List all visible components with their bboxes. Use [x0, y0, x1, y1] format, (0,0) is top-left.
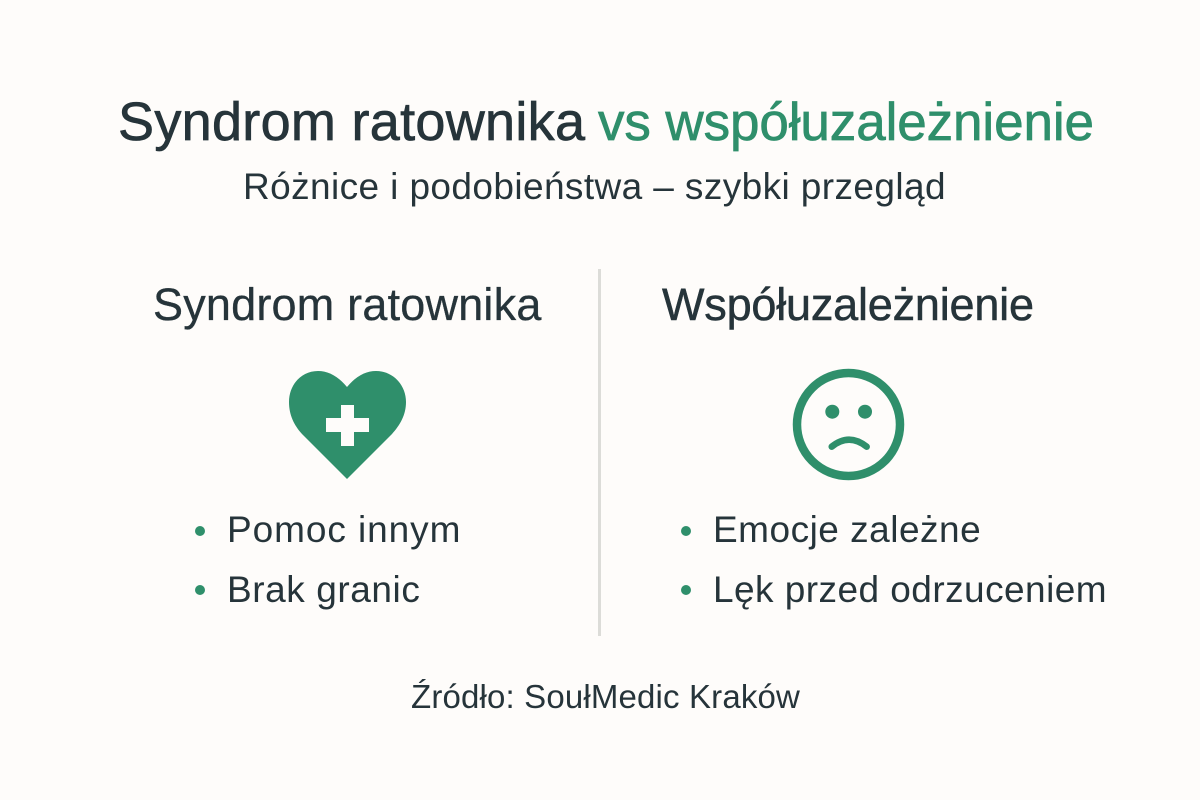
panel heading: współuzależnienie: Współuzależnienie: [662, 279, 1034, 330]
icon: sad face: [792, 368, 904, 480]
bullet: pomoc innym: Pomoc innym: [227, 509, 461, 550]
icon: heart with cross: [289, 371, 406, 479]
panel: syndrom ratownika: [153, 279, 542, 610]
bullet: emocje zależne: Emocje zależne: [713, 509, 981, 550]
panel: współuzależnienie: [662, 279, 1107, 610]
title: Syndrom ratownika: [118, 92, 585, 152]
divider: [598, 269, 601, 636]
panel heading: syndrom ratownika: Syndrom ratownika: [153, 279, 542, 330]
bullet: brak granic: Brak granic: [227, 569, 420, 610]
source note: Źródło: SoułMedic Kraków: [411, 678, 800, 715]
bullet: lęk przed odrzuceniem: Lęk przed odrzuceniem: [713, 569, 1107, 610]
title: [118, 92, 1094, 152]
subtitle: Różnice i podobieństwa – szybki przegląd: [243, 166, 946, 207]
title: vs współuzależnienie: [598, 93, 1094, 152]
